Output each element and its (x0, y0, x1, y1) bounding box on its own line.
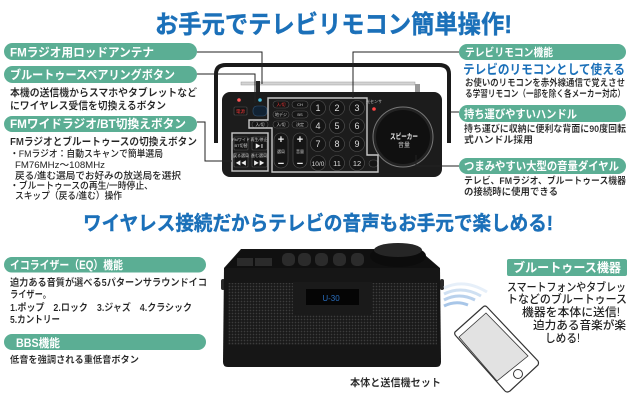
indicator lights (237, 98, 376, 111)
top panel (225, 250, 439, 268)
number keys: 3 (354, 103, 360, 113)
panel: FM wide / BT switch: ・ブルートゥースの再生/一時停止、 (10, 180, 153, 192)
panel: equalizer: 迫力ある音質が選べる5パターンサラウンドイコ (10, 276, 207, 289)
number keys: 5 (334, 121, 340, 131)
panel: Bluetooth device: ブルートゥース機器 (513, 260, 621, 275)
function buttons: 決定 (296, 121, 304, 127)
number keys: 12 (353, 159, 361, 168)
panel: equalizer (4, 257, 207, 326)
panel: FM wide / BT switch: 戻る/進む選局でお好みの放送局を選択 (15, 170, 182, 182)
band and transport buttons: BT切替 (234, 142, 248, 148)
function buttons: BS (297, 112, 303, 117)
panel: Bluetooth device (507, 259, 627, 345)
band and transport buttons: ▶‖ (255, 143, 263, 150)
side knobs (221, 279, 444, 290)
function buttons: CH (297, 102, 303, 107)
number keys (310, 100, 378, 170)
number keys: 6 (354, 121, 360, 131)
panel: volume dial (459, 158, 626, 198)
antenna (241, 81, 420, 93)
icon: smartphone (455, 306, 538, 392)
panel: Bluetooth device: トなどのブルートゥース (507, 292, 627, 306)
band and transport buttons (232, 136, 268, 167)
panel: Bluetooth device: しめる! (545, 332, 580, 345)
caption: 本体と送信機セット (350, 376, 441, 389)
leader lines (197, 52, 459, 166)
band and transport buttons: ▶▶ (253, 160, 265, 167)
panel: equalizer: 5.カントリー (10, 314, 60, 326)
panel: Bluetooth pairing (4, 66, 197, 112)
panel: equalizer: 1.ポップ 2.ロック 3.ジャズ 4.クラシック (10, 301, 192, 314)
panel: TV remote function (459, 44, 626, 100)
number keys: 8 (334, 139, 340, 149)
panel: Bluetooth pairing: にワイヤレス受信を切換えるボタン (10, 99, 166, 112)
power buttons (234, 106, 267, 116)
band and transport buttons: 戻る選局 (233, 152, 249, 158)
number keys: 7 (315, 139, 321, 149)
speaker grille (228, 283, 437, 345)
handle (216, 65, 449, 143)
volume dial (373, 107, 433, 167)
subtitle: ワイヤレス接続だからテレビの音声もお手元で楽しめる! (83, 212, 553, 235)
panel: Bluetooth pairing: 本機の送信機からスマホやタブレットなど (10, 86, 197, 99)
number keys: 4 (315, 121, 321, 131)
icon: wireless waves (444, 284, 487, 306)
panel: FM wide / BT switch: ・FMラジオ：自動スキャンで簡単選局 (10, 148, 163, 160)
number keys: 10/0 (312, 161, 325, 168)
top keys (237, 253, 364, 266)
title: お手元でテレビリモコン簡単操作! (155, 11, 512, 39)
power buttons: 電源 (236, 108, 245, 115)
display: U-30 (322, 294, 340, 303)
panel: equalizer: イコライザー（EQ）機能 (10, 258, 123, 272)
band and transport buttons: 再生/停止 (250, 136, 268, 142)
panel: FM wide / BT switch: FMラジオとブルートゥースの切換えボタン (10, 135, 197, 148)
radio top view (216, 65, 449, 177)
body (223, 249, 441, 367)
plus minus rockers (274, 133, 307, 170)
panel: equalizer: ライザー。 (10, 289, 51, 301)
plus minus rockers: + (297, 134, 303, 146)
function buttons: 入/切 (276, 101, 286, 107)
radio front view (221, 243, 444, 367)
function buttons (252, 101, 308, 128)
highlight frames (232, 98, 378, 172)
sensor label: 光センサ (366, 98, 382, 104)
number keys: 2 (334, 103, 340, 113)
number keys: 11 (333, 159, 341, 168)
panel: Bluetooth pairing: ブルートゥースペアリングボタン (10, 67, 175, 82)
panel: BBS: BBS機能 (16, 336, 60, 350)
panel: Bluetooth device: 機器を本体に送信! (522, 305, 620, 319)
volume dial: 音量 (398, 141, 410, 149)
panel: FM wide / BT switch: スキップ（戻る/進む）操作 (15, 190, 122, 202)
function buttons: 地デジ (275, 111, 287, 117)
panel: handle: 式ハンドル採用 (464, 134, 533, 146)
panel: FM antenna (4, 43, 197, 60)
panel: BBS: 低音を強調される重低音ボタン (10, 354, 139, 366)
display panel (293, 282, 372, 315)
band and transport buttons: FMワイド (232, 137, 250, 142)
band and transport buttons: ◀◀ (235, 160, 247, 167)
plus minus rockers: 選局 (277, 148, 285, 154)
plus minus rockers: 音量 (296, 148, 304, 154)
volume dial: スピーカー (390, 132, 418, 141)
plus minus rockers: − (278, 158, 284, 170)
panel: FM antenna: FMラジオ用ロッドアンテナ (10, 46, 154, 60)
volume dial (370, 243, 426, 267)
panel: volume dial: の接続時に使用できる (464, 186, 558, 198)
plus minus rockers: + (278, 134, 284, 146)
plus minus rockers: − (297, 158, 303, 170)
panel: handle (459, 105, 626, 146)
panel: FM wide / BT switch: FM76MHz～108MHz (15, 160, 106, 170)
panel: handle: 持ち運びやすいハンドル (464, 107, 577, 121)
function buttons: 入/切 (276, 121, 286, 127)
panel: Bluetooth device: 迫力ある音楽が楽 (533, 318, 627, 332)
display (306, 289, 359, 305)
function buttons: 入/切 (255, 121, 265, 127)
band and transport buttons: 進む選局 (251, 152, 267, 158)
panel: FM wide / BT switch (4, 116, 197, 202)
panel: FM wide / BT switch: FMワイドラジオ/BT切換えボタン (10, 116, 186, 131)
panel: TV remote function: テレビリモコン機能 (465, 45, 553, 59)
body (222, 92, 442, 177)
number keys: 9 (354, 139, 360, 149)
number keys: 1 (315, 103, 321, 113)
panel: BBS (4, 334, 206, 366)
